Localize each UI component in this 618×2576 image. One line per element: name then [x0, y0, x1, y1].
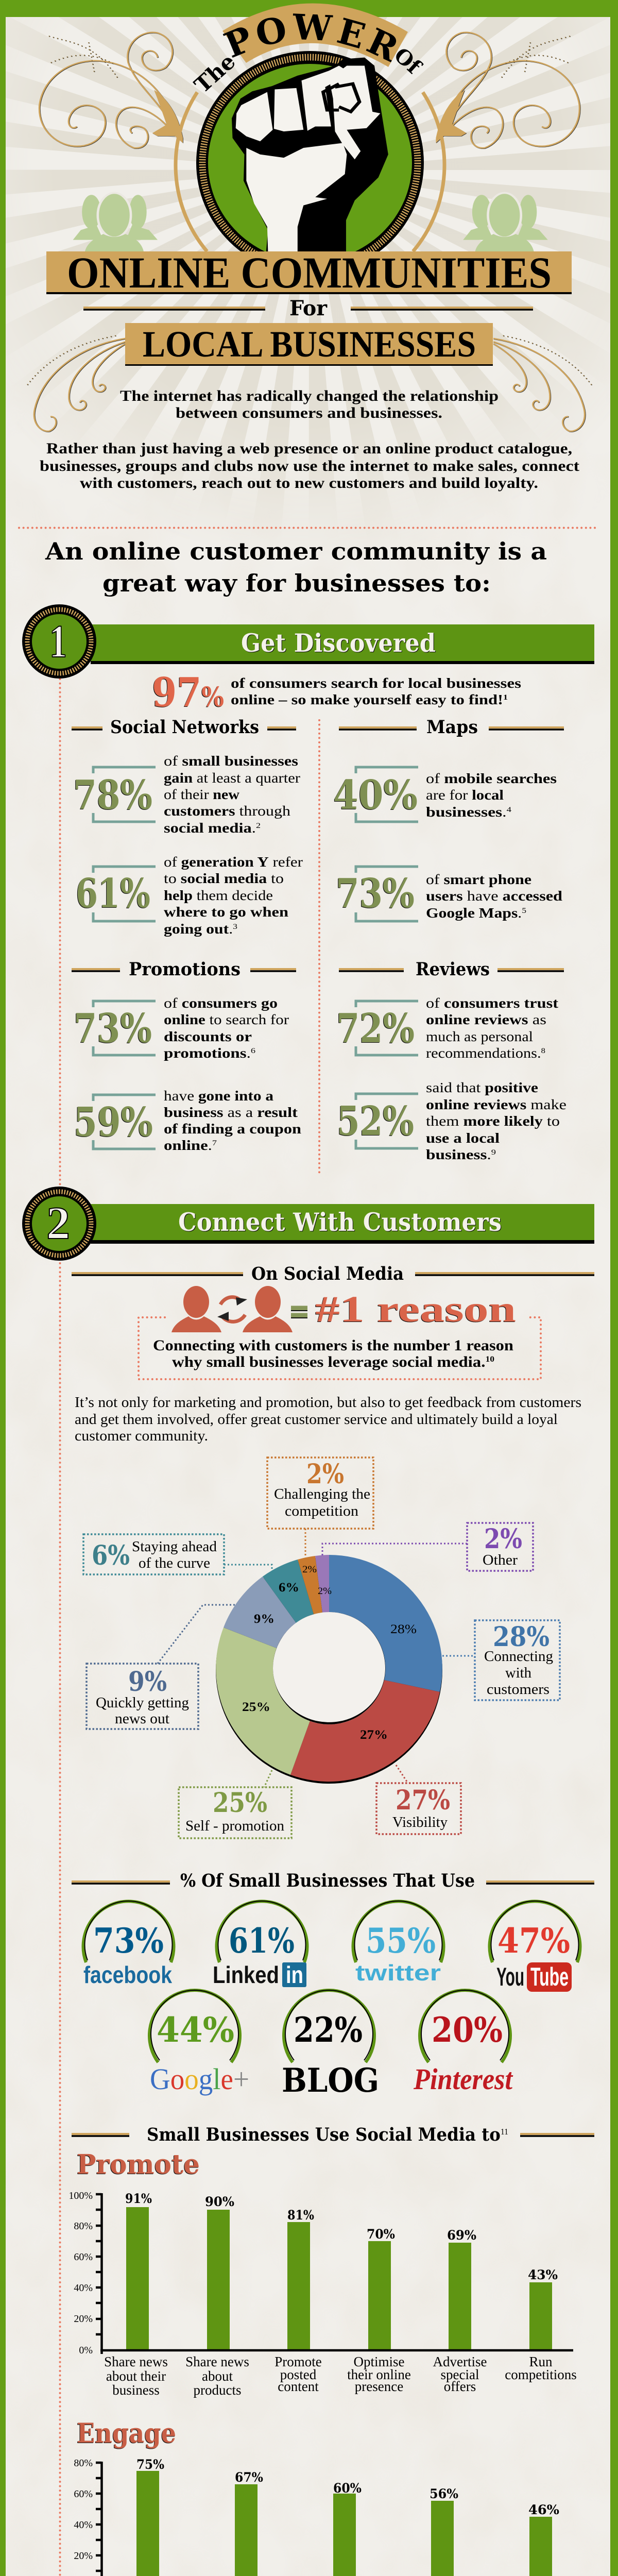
- band: connect with customers: [91, 1204, 594, 1244]
- callout: 2% challenging the competition: competition: [285, 1503, 359, 1519]
- band: get discovered: Get Discovered: [241, 628, 436, 658]
- intro text: businesses, groups and clubs now use the internet to make sales, connect: [40, 457, 579, 474]
- gauge: google plus 44%: [149, 1990, 249, 2096]
- bar chart: promote: competitions: [505, 2367, 577, 2382]
- bar chart: engage: 60%: [333, 2481, 362, 2496]
- callout: 2% other: 2%: [484, 1523, 522, 1555]
- stat: 72%: [336, 995, 558, 1061]
- banner: local businesses: LOCAL BUSINESSES: [143, 324, 476, 365]
- donut chart: 2%: [318, 1586, 332, 1597]
- bar chart: promote: content: [278, 2379, 319, 2394]
- stat: 72%: online reviews as: [426, 1012, 546, 1027]
- heading: social networks: Social Networks: [110, 717, 259, 738]
- stat: 52%: [337, 1080, 566, 1162]
- intro text: with customers, reach out to new customers and build loyalty.: [80, 474, 538, 492]
- stat: 61%: going out .: [164, 921, 232, 937]
- stat: 73% promotions: discounts or: [164, 1029, 252, 1044]
- bar chart: promote: 80%: [74, 2221, 93, 2232]
- callout: 27% visibility: [376, 1765, 461, 1834]
- badge: 2: [22, 1187, 96, 1261]
- stat: 72%: 8: [541, 1047, 545, 1055]
- stat: 61%: 3: [233, 923, 237, 931]
- bar chart: promote: Share news: [104, 2354, 168, 2369]
- bar chart: engage: [74, 2457, 589, 2576]
- stat: 78%: gain at least a quarter: [164, 770, 300, 786]
- stat: 40%: [333, 767, 557, 822]
- stat: 52%: online reviews make: [426, 1097, 566, 1112]
- bar chart: engage: 80%: [74, 2458, 93, 2469]
- bar chart: promote: about their: [106, 2368, 166, 2384]
- banner: online communities: ONLINE COMMUNITIES: [67, 248, 552, 297]
- callout: number 1 reason: [139, 1286, 541, 1379]
- bar chart: promote: Run: [529, 2354, 553, 2369]
- banner: the power arc: [222, 3, 408, 67]
- stat: 78%: of small businesses: [164, 753, 298, 769]
- callout: number 1 reason: Connecting with customers is the number 1 reason: [153, 1337, 513, 1354]
- bar chart: promote: posted: [280, 2367, 317, 2382]
- stat: 59%: business as a result: [164, 1105, 298, 1120]
- callout: 25% self-promotion: [179, 1770, 291, 1838]
- left upper flourish: [39, 32, 182, 148]
- stat: 59%: of finding a coupon: [164, 1121, 301, 1137]
- gauge: youtube 47%: [489, 1901, 580, 1992]
- stat: 72%: of consumers trust: [426, 995, 558, 1011]
- bar chart: promote: 100%: [68, 2190, 93, 2201]
- stat: 73% maps: 73%: [336, 870, 415, 917]
- callout: number 1 reason: why small businesses leverage social media.: [172, 1353, 458, 1370]
- bar chart: engage: 60%: [74, 2488, 93, 2500]
- bar chart: promote: their online: [347, 2367, 411, 2382]
- stat: 52%: said that positive: [426, 1080, 538, 1095]
- stat: 52%: business .: [426, 1147, 490, 1162]
- gauge: youtube 47%: You: [496, 1962, 524, 1991]
- gauge: linkedin 61%: 61%: [229, 1921, 295, 1961]
- callout: 9% quickly getting news out: [87, 1605, 236, 1729]
- donut chart: 6%: [279, 1581, 299, 1595]
- donut chart: 28%: [390, 1622, 417, 1636]
- title: power: POWER: [222, 13, 397, 62]
- gauge: linkedin 61%: [213, 1901, 307, 1988]
- badge: 1: [22, 604, 96, 679]
- left lower flourish: [28, 335, 125, 431]
- title: of: Of: [389, 43, 426, 80]
- stat: 73% promotions: of consumers go: [164, 995, 278, 1011]
- callout: 27% visibility: Visibility: [392, 1814, 448, 1831]
- gauge: blog 22%: BLOG: [282, 2061, 379, 2100]
- stat: 73% promotions: [74, 995, 289, 1061]
- gauge: blog 22%: 22%: [294, 2010, 363, 2050]
- stat: 78%: of their new: [164, 787, 240, 802]
- gauge: blog 22%: [282, 1990, 379, 2100]
- callout: 6% staying ahead: 6%: [92, 1540, 130, 1571]
- bar chart: promote: 69%: [447, 2228, 476, 2243]
- stat: 73% promotions: 73%: [74, 1005, 152, 1052]
- stat: 73% maps: of smart phone: [426, 872, 531, 887]
- heading: promotions: Promotions: [129, 959, 241, 980]
- callout: 28% connecting with customers: customers: [487, 1681, 550, 1698]
- bar chart: promote: products: [194, 2382, 241, 2398]
- stat: 61%: to social media to: [164, 871, 284, 886]
- callout: 6% staying ahead: of the curve: [139, 1555, 210, 1571]
- band: connect with customers: Connect With Customers: [178, 1207, 502, 1237]
- stat: 97%: online – so make yourself easy to find!: [231, 692, 457, 707]
- title: for: For: [289, 296, 328, 320]
- callout: 2% other: Other: [483, 1552, 518, 1568]
- paragraph: not only marketing: It’s not only for marketing and promotion, but also to get feedback from customers: [75, 1394, 581, 1411]
- stat: 78%: 78%: [73, 772, 152, 819]
- gauge: facebook 73%: [83, 1901, 174, 1988]
- bar chart: promote: 60%: [74, 2251, 93, 2263]
- stat: 78%: [73, 753, 300, 836]
- donut chart: [216, 1555, 442, 1784]
- stat: 52%: 52%: [337, 1098, 414, 1145]
- bar chart: promote: 90%: [205, 2194, 234, 2209]
- stat: 73% maps: Google Maps .: [426, 905, 521, 921]
- stat: 40%: are for local: [426, 787, 504, 803]
- bar chart: engage: 46%: [528, 2502, 559, 2517]
- callout: 2% challenging the competition: 2%: [306, 1459, 344, 1490]
- gold ring: [176, 92, 444, 251]
- stat: 97%: [152, 669, 521, 716]
- heading: an online customer community: An online customer community is a: [45, 537, 547, 565]
- stat: 78%: 2: [256, 822, 261, 830]
- heading: percent of small businesses: % Of Small Businesses That Use: [180, 1870, 475, 1891]
- gauge: youtube 47%: Tube: [530, 1962, 569, 1991]
- stat: 73% maps: users have accessed: [426, 888, 562, 904]
- bar chart: promote: Optimise: [353, 2354, 405, 2369]
- callout: 28% connecting with customers: 28%: [493, 1621, 550, 1653]
- paragraph: not only marketing: customer community.: [75, 1428, 208, 1444]
- callout: 6% staying ahead: [83, 1534, 272, 1574]
- gauge: twitter 55%: twitter: [355, 1960, 441, 1986]
- intro text: between consumers and businesses.: [176, 404, 442, 421]
- gauge: pinterest 20%: Pinterest: [413, 2062, 513, 2096]
- bar chart: promote: about: [202, 2368, 233, 2384]
- bar chart: promote: 20%: [74, 2313, 93, 2325]
- callout: number 1 reason: 10: [485, 1355, 494, 1364]
- gauge: linkedin 61%: in: [286, 1961, 303, 1988]
- bar chart: promote: Advertise: [433, 2354, 487, 2369]
- stat: 61%: help them decide: [164, 888, 273, 903]
- donut chart: 25%: [242, 1700, 270, 1714]
- stat: 97%: 97%: [152, 669, 224, 716]
- stat: 78%: customers through: [164, 803, 291, 819]
- callout: 2% challenging the competition: Challenging the: [274, 1486, 370, 1502]
- flourishes and people icons: [28, 32, 591, 431]
- stat: 59%: 59%: [74, 1099, 153, 1146]
- bar chart: promote: presence: [355, 2379, 403, 2394]
- stat: 59%: [74, 1088, 301, 1153]
- stat: 73% maps: 5: [522, 907, 526, 915]
- stat: 97%: 1: [503, 693, 508, 702]
- icon: raised fist: [232, 58, 388, 252]
- callout: 9% quickly getting news out: news out: [115, 1710, 169, 1727]
- stat: 61%: where to go when: [164, 904, 288, 920]
- gauge: google plus 44%: 44%: [157, 2010, 234, 2050]
- bar chart: promote: offers: [444, 2379, 476, 2394]
- bar chart: promote: 0%: [79, 2345, 93, 2356]
- gauge: twitter 55%: [353, 1901, 443, 1986]
- stat: 61%: of generation Y refer: [164, 854, 303, 870]
- heading: an online customer community: [45, 537, 547, 597]
- bar chart: promote: business: [112, 2382, 160, 2398]
- panel: maps: [333, 717, 564, 921]
- section 1: get discovered: [22, 604, 594, 1162]
- bar chart: engage: 40%: [74, 2519, 93, 2531]
- intro text: The internet has radically changed the relationship: [120, 387, 499, 404]
- stat: 61%: [76, 854, 303, 937]
- heading: an online customer community: great way for businesses to:: [102, 569, 491, 597]
- bar chart: promote: [68, 2190, 577, 2398]
- callout: 27% visibility: 27%: [396, 1785, 450, 1816]
- bar chart: engage: 56%: [430, 2486, 458, 2501]
- badge: 2: 2: [46, 1198, 70, 1249]
- icon: left community people: [73, 193, 158, 252]
- bar chart: promote: Promote: [274, 2354, 322, 2369]
- right lower flourish: [493, 335, 591, 431]
- bar chart: promote: 70%: [367, 2227, 395, 2242]
- bar chart: promote: 40%: [74, 2282, 93, 2294]
- panel: social platforms usage: [72, 1870, 594, 2100]
- gauge: google plus 44%: Google+: [150, 2062, 249, 2096]
- right upper flourish: [437, 32, 579, 148]
- band: get discovered: [91, 624, 594, 664]
- stat: 72%: 72%: [336, 1005, 415, 1052]
- icon: right community people: [463, 193, 548, 252]
- gauge: facebook 73%: facebook: [83, 1961, 172, 1988]
- intro text: Rather than just having a web presence or an online product catalogue,: [46, 440, 572, 457]
- bar chart: promote: special: [441, 2367, 479, 2382]
- gauge: facebook 73%: 73%: [93, 1921, 164, 1961]
- heading: small businesses use social media to: Small Businesses Use Social Media to: [147, 2124, 529, 2145]
- gauge: pinterest 20%: [413, 1990, 513, 2096]
- stat: 61%: 61%: [76, 870, 150, 917]
- stat: 73% promotions: promotions .: [164, 1045, 250, 1061]
- section 2: connect with customers: [22, 1187, 595, 2576]
- heading: promote: Promote: [77, 2149, 200, 2180]
- stat: 40%: 4: [507, 806, 512, 814]
- callout: 25% self-promotion: Self - promotion: [185, 1818, 284, 1834]
- icon: two people connecting: [171, 1286, 293, 1332]
- stat: 40%: businesses .: [426, 804, 506, 820]
- stat: 59%: online .: [164, 1138, 211, 1153]
- donut chart: 9%: [254, 1612, 274, 1626]
- callout: 6% staying ahead: Staying ahead: [132, 1538, 217, 1555]
- heading: maps: Maps: [426, 717, 478, 738]
- callout: 2% challenging the competition: [267, 1458, 373, 1556]
- bar chart: promote: 81%: [287, 2208, 314, 2223]
- bar chart: engage: 75%: [136, 2457, 164, 2472]
- stat: 59%: 7: [212, 1139, 217, 1147]
- heading: small businesses use social media to: 11: [501, 2127, 508, 2137]
- stat: 52%: them more likely to: [426, 1113, 560, 1129]
- stat: 40%: 40%: [333, 772, 418, 819]
- text: #1 reason: #1 reason: [315, 1289, 516, 1330]
- stat: 52%: use a local: [426, 1130, 500, 1146]
- bar chart: engage: 20%: [74, 2550, 93, 2562]
- badge: 1: 1: [49, 616, 67, 667]
- heading: engage: Engage: [77, 2418, 176, 2449]
- stat: 59%: have gone into a: [164, 1088, 274, 1104]
- stat: 72%: recommendations.: [426, 1045, 528, 1061]
- paragraph: not only marketing: [75, 1394, 581, 1444]
- stat: 73% promotions: online to search for: [164, 1012, 289, 1027]
- panel: social networks: [72, 717, 303, 937]
- callout: 28% connecting with customers: with: [505, 1665, 531, 1681]
- emblem oval: [196, 51, 424, 275]
- gauge: youtube 47%: 47%: [497, 1921, 570, 1961]
- stat: 73% maps: [336, 867, 562, 921]
- stat: 78%: social media .: [164, 820, 255, 836]
- callout: 2% other: [322, 1523, 533, 1571]
- panel: promotions: [72, 959, 301, 1153]
- stat: 73% promotions: 6: [251, 1047, 256, 1055]
- donut chart: 2%: [302, 1564, 317, 1575]
- donut chart: 27%: [360, 1728, 388, 1742]
- gauge: linkedin 61%: Linked: [213, 1961, 279, 1988]
- bar chart: engage: 67%: [235, 2470, 263, 2485]
- callout: 28% connecting with customers: Connecting: [484, 1648, 553, 1665]
- gauge: twitter 55%: 55%: [366, 1921, 436, 1961]
- stat: 97%: of consumers search for local businesses: [231, 675, 521, 691]
- callout: 28% connecting with customers: [442, 1620, 560, 1700]
- bar chart: promote: 43%: [528, 2267, 558, 2282]
- bar chart: promote: 91%: [125, 2191, 152, 2206]
- stat: 52%: 9: [491, 1148, 496, 1157]
- title: the: The: [190, 48, 241, 98]
- intro text: [40, 387, 579, 492]
- stat: 40%: of mobile searches: [426, 771, 557, 786]
- heading: reviews: Reviews: [416, 959, 490, 980]
- heading: on social media: On Social Media: [251, 1263, 404, 1284]
- equals sign: [291, 1308, 307, 1318]
- bar chart: promote: Share news: [185, 2354, 249, 2369]
- callout: 9% quickly getting news out: 9%: [128, 1666, 167, 1698]
- callout: 9% quickly getting news out: Quickly getting: [96, 1694, 189, 1711]
- stat: 72%: much as personal: [426, 1029, 533, 1044]
- header illustration: [27, 3, 592, 433]
- paragraph: not only marketing: and get them involved, offer great customer service and ultimately build a loyal: [75, 1411, 558, 1428]
- panel: reviews: [336, 959, 566, 1162]
- gauge: pinterest 20%: 20%: [432, 2010, 503, 2050]
- callout: 25% self-promotion: 25%: [213, 1787, 267, 1819]
